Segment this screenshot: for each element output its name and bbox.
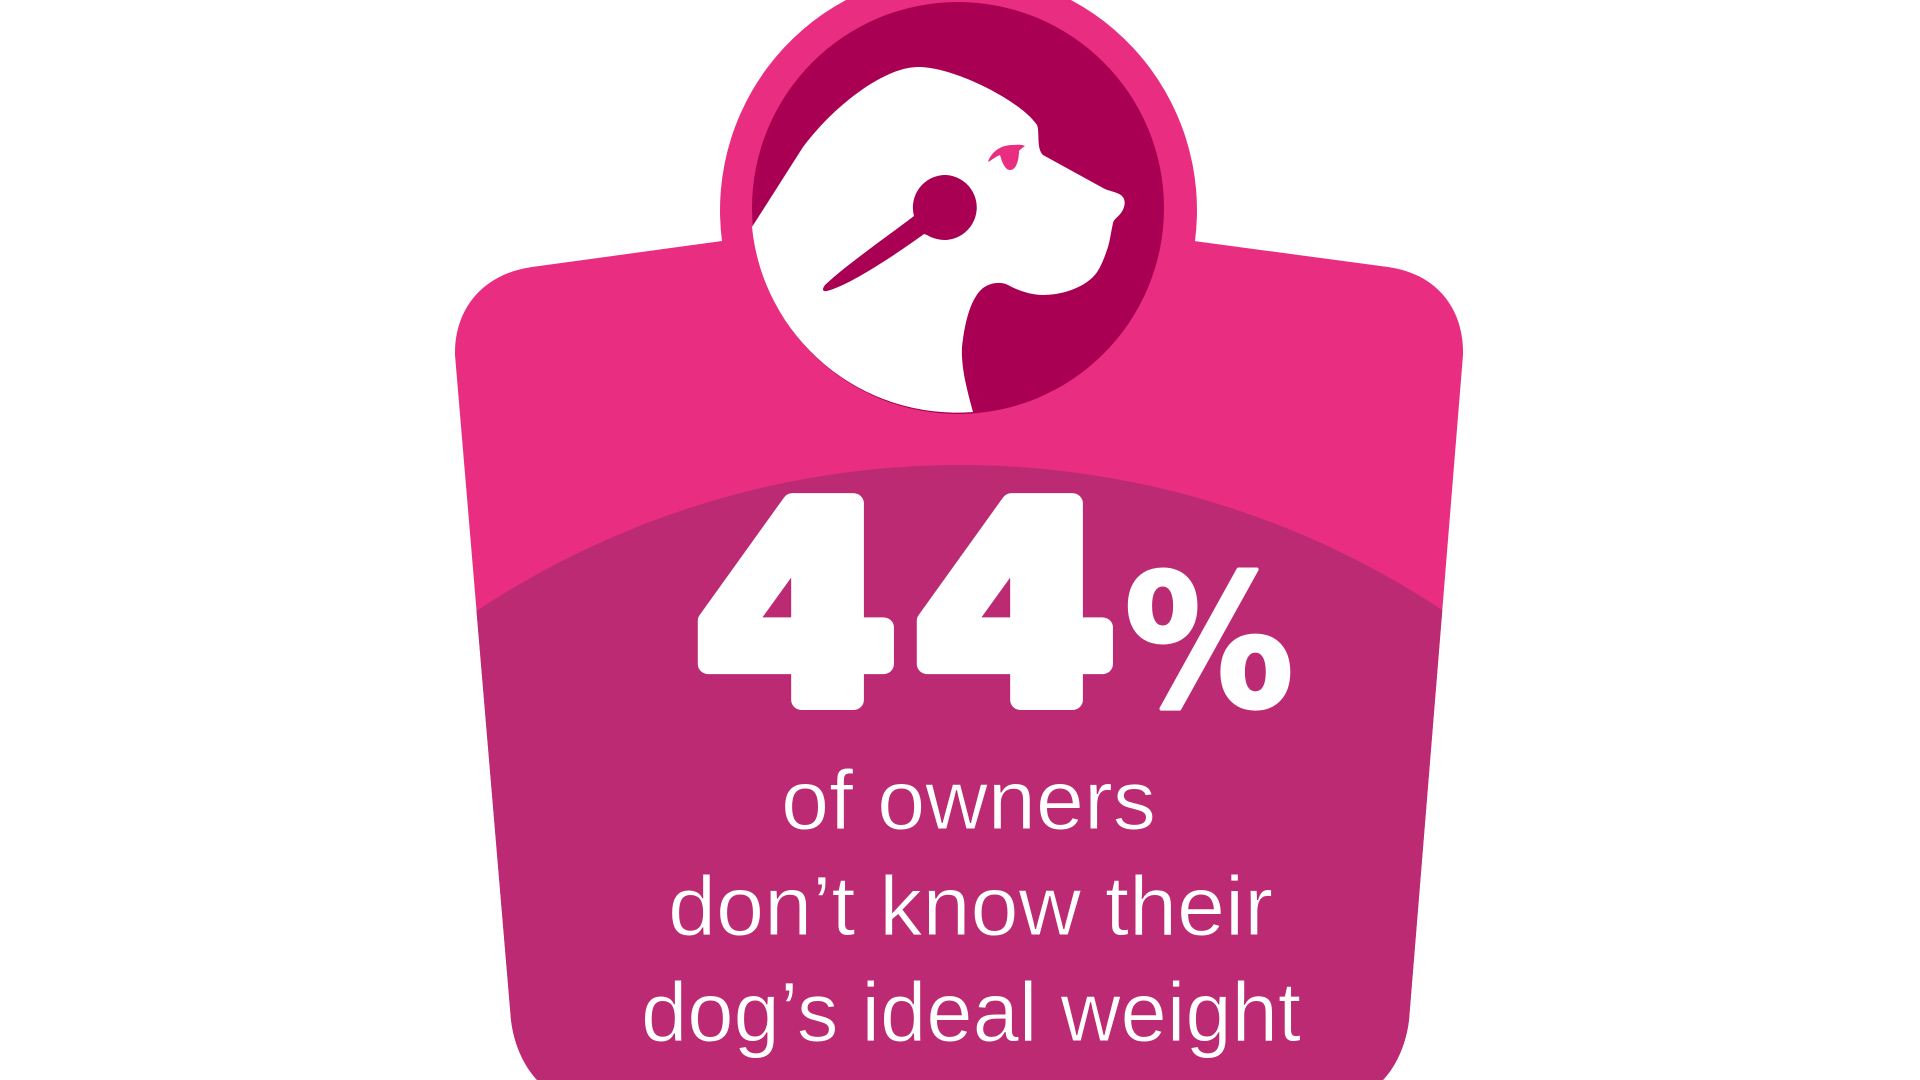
- caption text: don’t know their: [668, 859, 1273, 953]
- dial inner circle: [752, 2, 1164, 414]
- statistic: 44%: [695, 449, 1294, 764]
- icon: dog head silhouette: [752, 67, 1125, 413]
- statistic: 44%: 4: [695, 449, 897, 764]
- scale lower panel: [476, 465, 1442, 1080]
- scale body: [455, 241, 1463, 1080]
- statistic: 44%: 4: [914, 449, 1116, 764]
- icon: dog eye: [988, 145, 1025, 170]
- icon: scale dial with dog: [720, 0, 1197, 414]
- caption text: [641, 753, 1301, 1059]
- icon: scale needle: [823, 175, 977, 291]
- caption text: of owners: [781, 753, 1156, 847]
- scale upper body: [455, 241, 1463, 1080]
- statistic: 44%: %: [1124, 535, 1294, 750]
- dial outer ring: [720, 0, 1197, 449]
- caption text: dog’s ideal weight: [641, 965, 1301, 1059]
